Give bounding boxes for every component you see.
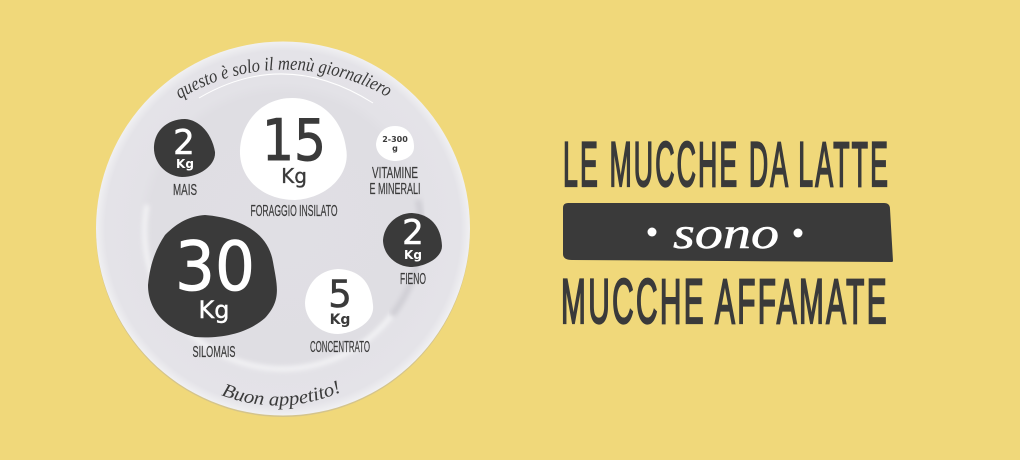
blob: vitamine 2-300 g: g [392, 144, 398, 153]
label: foraggio insilato: FORAGGIO INSILATO [250, 203, 338, 220]
blob: fieno 2 kg [383, 213, 442, 267]
blob: concentrato 5 kg: Kg [330, 312, 350, 328]
blob: silomais 30 kg: 30 [175, 228, 255, 307]
blob: fieno 2 kg: Kg [404, 248, 422, 262]
blob: silomais 30 kg [148, 215, 277, 337]
blob: mais 2 kg [154, 119, 215, 177]
label: vitamine e minerali [370, 165, 420, 198]
blob: foraggio insilato 15 kg [240, 98, 347, 200]
plate footer: buon appetito: Buon appetito! [221, 380, 339, 410]
blob: fieno 2 kg: 2 [402, 213, 424, 253]
label: vitamine e minerali: E MINERALI [370, 181, 420, 198]
banner: sono [673, 209, 779, 258]
label: mais: MAIS [173, 182, 197, 199]
plate [96, 42, 470, 417]
blob: vitamine 2-300 g [376, 126, 414, 161]
blob: foraggio insilato 15 kg: 15 [262, 108, 326, 174]
blob: foraggio insilato 15 kg: Kg [281, 164, 307, 188]
blob: silomais 30 kg: Kg [199, 296, 229, 324]
label: vitamine e minerali: VITAMINE [372, 165, 418, 182]
blob: mais 2 kg: Kg [176, 157, 194, 171]
label: silomais: SILOMAIS [192, 344, 236, 361]
blob: concentrato 5 kg: 5 [328, 273, 352, 316]
plate heading: questo è solo il menù giornaliero: questo è solo il menù giornaliero [178, 56, 390, 100]
banner [563, 203, 893, 262]
blob: vitamine 2-300 g: 2-300 [382, 135, 408, 144]
label: fieno: FIENO [400, 271, 426, 288]
blob: mais 2 kg: 2 [173, 123, 195, 163]
text: CONCENTRATO [310, 339, 370, 356]
blob: concentrato 5 kg [305, 269, 373, 334]
